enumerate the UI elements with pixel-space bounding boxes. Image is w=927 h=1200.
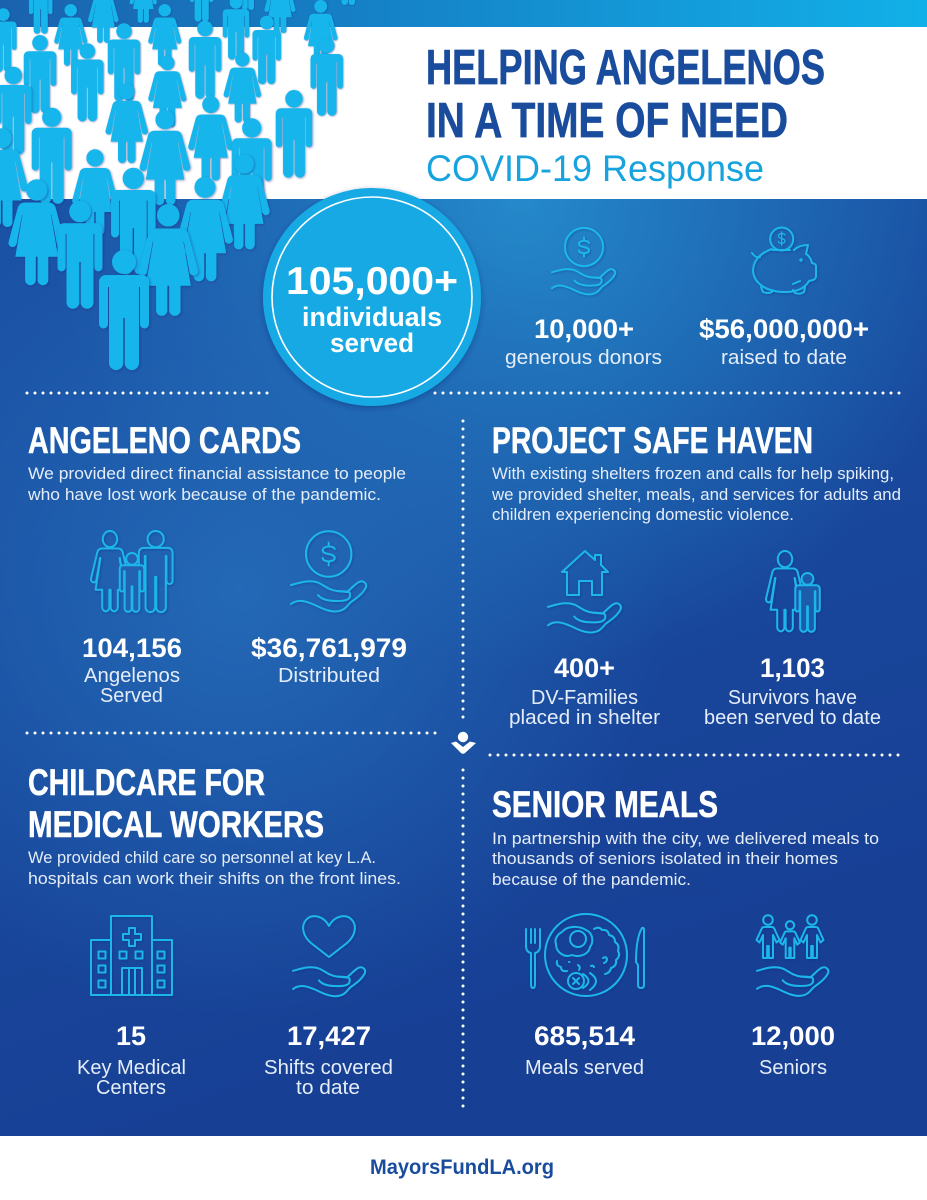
text block: We provided child care so personnel at key L.A. — [28, 848, 376, 867]
heading: PROJECT SAFE HAVEN — [492, 420, 813, 461]
text block: because of the pandemic. — [492, 870, 691, 889]
stat: donors — [505, 228, 662, 369]
stat: shifts: Shifts covered — [264, 1057, 393, 1079]
stat: distributed: $36,761,979 — [251, 633, 407, 663]
stat: medical centers: Key Medical — [77, 1057, 186, 1079]
panel: Project Safe Haven — [491, 420, 901, 729]
stat: DV families — [509, 653, 660, 729]
stat: DV families: placed in shelter — [509, 707, 660, 729]
stat: survivors: been served to date — [704, 707, 881, 729]
panel: Senior Meals — [492, 784, 879, 1079]
text block: we provided shelter, meals, and services for adults and — [491, 485, 901, 504]
icon: mother and child — [766, 551, 820, 632]
stat: meals — [525, 1021, 644, 1079]
callout: 105,000+ individuals served: individuals — [302, 302, 442, 332]
stat: survivors: Survivors have — [728, 687, 857, 709]
stat: donors: 10,000+ — [534, 314, 634, 344]
title: COVID-19 Response — [426, 148, 764, 189]
stat: shifts: to date — [296, 1077, 360, 1099]
text block: In partnership with the city, we delivered meals to — [492, 829, 879, 848]
heading — [28, 762, 324, 845]
stat: distributed: Distributed — [278, 665, 380, 687]
stat: raised: raised to date — [721, 347, 847, 369]
stat: meals: Meals served — [525, 1057, 644, 1079]
icon: seniors over hand — [756, 915, 828, 996]
text block: We provided direct financial assistance to people — [28, 464, 406, 483]
illustration: crowd of people — [0, 0, 360, 370]
stat: survivors: 1,103 — [760, 653, 825, 683]
stat: distributed — [251, 633, 407, 687]
text block: children experiencing domestic violence. — [492, 505, 794, 524]
stat: raised: $56,000,000+ — [699, 314, 869, 344]
text block: who have lost work because of the pandemic. — [27, 485, 381, 504]
stat: Angelenos served: Served — [100, 685, 163, 707]
stat: medical centers: 15 — [116, 1021, 146, 1051]
text block — [492, 829, 879, 889]
stat: seniors: Seniors — [759, 1057, 827, 1079]
text block — [491, 464, 901, 524]
icon: coin over hand — [291, 531, 366, 611]
stat: donors: generous donors — [505, 347, 662, 369]
callout: 105,000+ individuals served: 105,000+ — [286, 260, 458, 303]
stat: DV families: 400+ — [554, 653, 615, 683]
title: IN A TIME OF NEED — [426, 94, 788, 148]
text block: thousands of seniors isolated in their homes — [492, 849, 838, 868]
stat: Angelenos served: 104,156 — [82, 633, 182, 663]
stat: raised — [699, 228, 869, 369]
text block — [27, 464, 406, 504]
text block — [28, 848, 401, 888]
icon: family — [91, 531, 173, 612]
callout: 105,000+ individuals served: served — [330, 328, 414, 358]
stat: meals: 685,514 — [534, 1021, 635, 1051]
icon: hospital — [91, 916, 172, 995]
stat: seniors — [751, 1021, 835, 1079]
heading: SENIOR MEALS — [492, 784, 718, 825]
text block: With existing shelters frozen and calls for help spiking, — [492, 464, 894, 483]
heading: ANGELENO CARDS — [28, 420, 301, 461]
heading: CHILDCARE FOR — [28, 762, 265, 803]
stat: seniors: 12,000 — [751, 1021, 835, 1051]
stat: DV families: DV-Families — [531, 687, 638, 709]
icon: coin over hand — [552, 228, 615, 294]
heading: MEDICAL WORKERS — [28, 804, 324, 845]
stat: medical centers: Centers — [96, 1077, 166, 1099]
stat: Angelenos served — [82, 633, 182, 707]
icon: house over hand — [548, 551, 621, 633]
stat: shifts — [264, 1021, 393, 1099]
footer: website: MayorsFundLA.org — [370, 1156, 554, 1179]
panel: Childcare for Medical Workers — [28, 762, 401, 1099]
icon: divider marker — [451, 732, 476, 754]
callout: 105,000+ individuals served — [263, 188, 481, 406]
icon: piggy bank — [752, 228, 816, 294]
stat: Angelenos served: Angelenos — [84, 665, 180, 687]
panel: Angeleno Cards — [27, 420, 407, 707]
text block: hospitals can work their shifts on the front lines. — [28, 869, 401, 888]
icon: plate of food — [526, 914, 644, 996]
dotted dividers — [27, 393, 902, 1110]
icon: heart over hand — [293, 916, 365, 996]
stat: shifts: 17,427 — [287, 1021, 371, 1051]
stat: medical centers — [77, 1021, 186, 1099]
stat: survivors — [704, 653, 881, 729]
title — [426, 41, 825, 189]
